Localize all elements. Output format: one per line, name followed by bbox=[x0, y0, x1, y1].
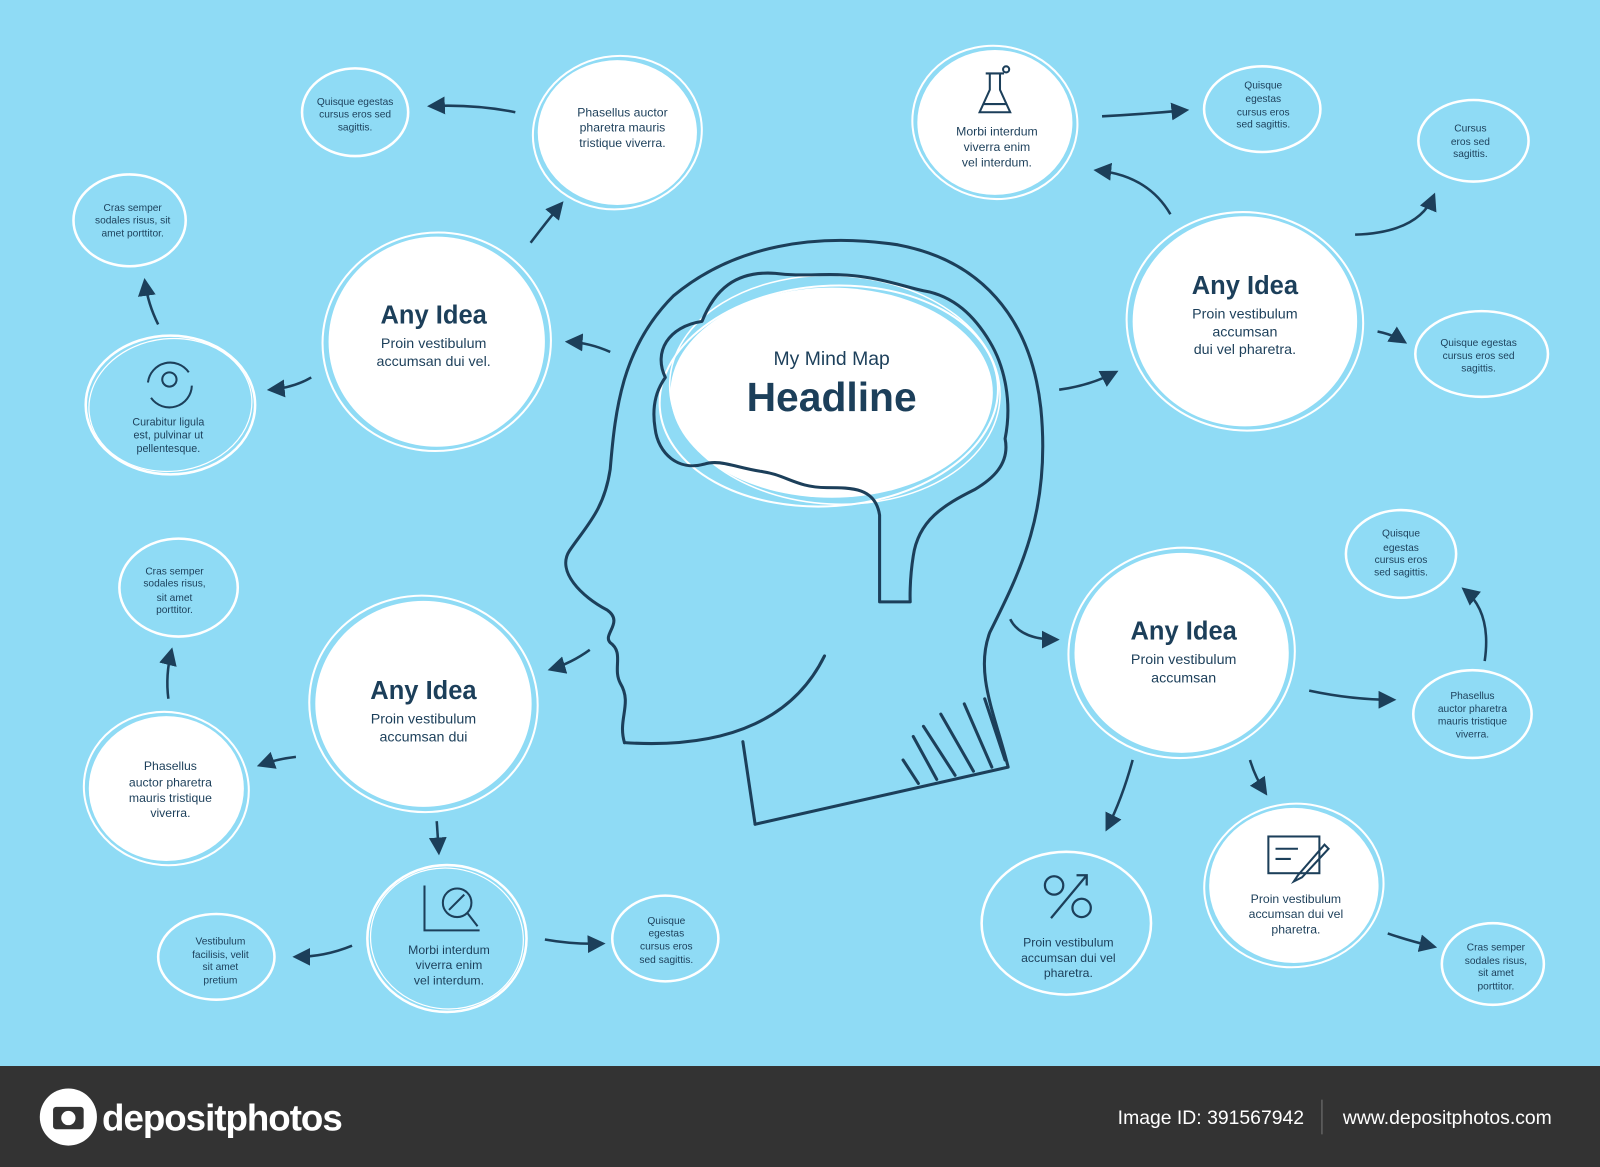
idea node top-right: accumsan bbox=[1212, 325, 1277, 341]
small node 8: sit amet bbox=[1478, 968, 1514, 979]
small node 2: sodales risus, sit bbox=[95, 215, 170, 226]
node: chart icon bbox=[361, 858, 533, 1019]
small node 10: facilisis, velit bbox=[192, 950, 249, 961]
small node 6: cursus eros bbox=[1375, 555, 1427, 566]
node: phasellus top: Phasellus auctor bbox=[577, 105, 668, 119]
small node 10: sit amet bbox=[203, 962, 238, 973]
idea node bottom-right: Any Idea bbox=[1131, 618, 1238, 646]
node: chart icon: Morbi interdum bbox=[408, 943, 490, 957]
icon: note with pencil bbox=[1268, 836, 1329, 881]
node: percent icon: accumsan dui vel bbox=[1021, 951, 1116, 965]
small node 5: sagittis. bbox=[1461, 363, 1496, 374]
small node 9: Quisque bbox=[647, 916, 686, 927]
node: phasellus left: Phasellus bbox=[144, 759, 197, 773]
icon: percent bbox=[1045, 875, 1091, 918]
small node 4: sagittis. bbox=[1453, 149, 1488, 160]
headline text: Headline bbox=[747, 374, 917, 420]
small node 3: Quisque bbox=[1244, 81, 1283, 92]
small node 1: Quisque egestas bbox=[317, 97, 393, 108]
small node 1: sagittis. bbox=[338, 123, 372, 134]
node: phasellus top bbox=[521, 43, 714, 223]
small node 2: amet porttitor. bbox=[101, 229, 164, 240]
node: percent icon: Proin vestibulum bbox=[1023, 936, 1114, 950]
small node 1: cursus eros sed bbox=[319, 109, 391, 120]
headline text bbox=[747, 348, 917, 420]
small node 6: sed sagittis. bbox=[1374, 567, 1428, 578]
idea node bottom-right bbox=[1058, 537, 1305, 769]
icon: flask bbox=[980, 66, 1010, 112]
idea node top-right: dui vel pharetra. bbox=[1194, 342, 1296, 358]
node: flask: Morbi interdum bbox=[956, 125, 1038, 139]
node: recycle icon: Curabitur ligula bbox=[132, 416, 204, 428]
small node 11: sit amet bbox=[157, 593, 192, 604]
node: phasellus left bbox=[72, 699, 261, 878]
idea node top-left: accumsan dui vel. bbox=[377, 354, 491, 370]
small node 9 bbox=[612, 896, 718, 981]
node: pencil icon bbox=[1194, 792, 1394, 979]
node: percent icon: pharetra. bbox=[1044, 966, 1093, 980]
node: recycle icon: est, pulvinar ut bbox=[134, 430, 203, 442]
small node 6: Quisque bbox=[1382, 529, 1420, 540]
small node 2 bbox=[73, 174, 186, 266]
node: pencil icon: Proin vestibulum bbox=[1251, 892, 1341, 906]
small node 10: Vestibulum bbox=[195, 937, 245, 948]
idea node top-left: Proin vestibulum bbox=[381, 336, 486, 352]
small node 5: cursus eros sed bbox=[1443, 351, 1515, 362]
small node 3 bbox=[1204, 66, 1320, 152]
node: pencil icon: pharetra. bbox=[1271, 922, 1320, 936]
node: percent icon bbox=[982, 852, 1151, 995]
node: phasellus left: auctor pharetra bbox=[129, 776, 212, 790]
node: chart icon: viverra enim bbox=[416, 958, 482, 972]
small node 6: egestas bbox=[1383, 543, 1419, 554]
small node 7: viverra. bbox=[1456, 730, 1489, 741]
small node 5: Quisque egestas bbox=[1440, 338, 1517, 349]
small node 3: sed sagittis. bbox=[1236, 120, 1290, 131]
small node 3: egestas bbox=[1245, 94, 1281, 105]
small node 10: pretium bbox=[203, 975, 237, 986]
small node 9: egestas bbox=[648, 928, 684, 939]
small node 9: sed sagittis. bbox=[639, 955, 693, 966]
node: flask: viverra enim bbox=[964, 140, 1030, 154]
small node 8: sodales risus, bbox=[1465, 956, 1527, 967]
idea node bottom-left bbox=[297, 583, 550, 825]
idea node top-right bbox=[1116, 200, 1374, 442]
footer bar bbox=[0, 1066, 1600, 1167]
head outline bbox=[566, 240, 1043, 824]
central node: headline bbox=[652, 267, 1006, 518]
small node 11: porttitor. bbox=[156, 605, 193, 616]
node: phasellus left: mauris tristique bbox=[129, 791, 212, 805]
small node 5 bbox=[1415, 311, 1548, 397]
headline text: My Mind Map bbox=[773, 348, 890, 370]
small node 7: mauris tristique bbox=[1438, 716, 1507, 727]
footer logo: depositphotos bbox=[102, 1097, 342, 1138]
small node 9: cursus eros bbox=[640, 942, 693, 953]
node: phasellus top: pharetra mauris bbox=[580, 121, 665, 135]
idea node bottom-left: accumsan dui bbox=[379, 730, 467, 746]
node: recycle icon: pellentesque. bbox=[137, 443, 200, 455]
node: phasellus left: viverra. bbox=[150, 806, 190, 820]
idea node bottom-left: Proin vestibulum bbox=[371, 711, 476, 727]
small node 2: Cras semper bbox=[103, 203, 162, 214]
small node 7 bbox=[1413, 670, 1532, 758]
idea node top-left: Any Idea bbox=[381, 301, 488, 329]
small node 10 bbox=[158, 914, 274, 1000]
small node 11 bbox=[119, 539, 238, 637]
small node 4: eros sed bbox=[1451, 137, 1490, 148]
node: pencil icon: accumsan dui vel bbox=[1249, 907, 1343, 921]
small node 4 bbox=[1418, 100, 1529, 182]
brain bbox=[654, 273, 1008, 602]
node: recycle icon bbox=[82, 331, 259, 479]
node: chart icon: vel interdum. bbox=[414, 973, 484, 987]
small node 8 bbox=[1442, 923, 1544, 1005]
footer info: www.depositphotos.com bbox=[1342, 1107, 1552, 1129]
icon: cycle bbox=[148, 363, 192, 407]
small node 6 bbox=[1346, 510, 1456, 598]
footer logo bbox=[40, 1088, 342, 1146]
small node 4: Cursus bbox=[1454, 124, 1487, 135]
footer info: Image ID: 391567942 bbox=[1118, 1107, 1304, 1129]
icon: chart magnifier bbox=[424, 885, 480, 930]
small node 7: auctor pharetra bbox=[1438, 704, 1507, 715]
idea node bottom-right: accumsan bbox=[1151, 670, 1216, 686]
small node 8: porttitor. bbox=[1478, 982, 1514, 993]
small node 3: cursus eros bbox=[1237, 107, 1290, 118]
small node 11: sodales risus, bbox=[143, 579, 206, 590]
node: flask: vel interdum. bbox=[962, 155, 1032, 169]
node: flask bbox=[902, 35, 1087, 210]
idea node bottom-left: Any Idea bbox=[370, 677, 477, 705]
idea node top-left bbox=[308, 218, 565, 466]
small node 11: Cras semper bbox=[145, 566, 204, 577]
footer info bbox=[1118, 1100, 1552, 1134]
node: phasellus top: tristique viverra. bbox=[579, 136, 666, 150]
small node 7: Phasellus bbox=[1450, 691, 1495, 702]
small node 8: Cras semper bbox=[1467, 943, 1526, 954]
idea node top-right: Proin vestibulum bbox=[1192, 306, 1298, 322]
idea node bottom-right: Proin vestibulum bbox=[1131, 652, 1236, 668]
idea node top-right: Any Idea bbox=[1192, 272, 1299, 300]
arrows bbox=[145, 106, 1486, 957]
small node 1 bbox=[302, 68, 408, 156]
